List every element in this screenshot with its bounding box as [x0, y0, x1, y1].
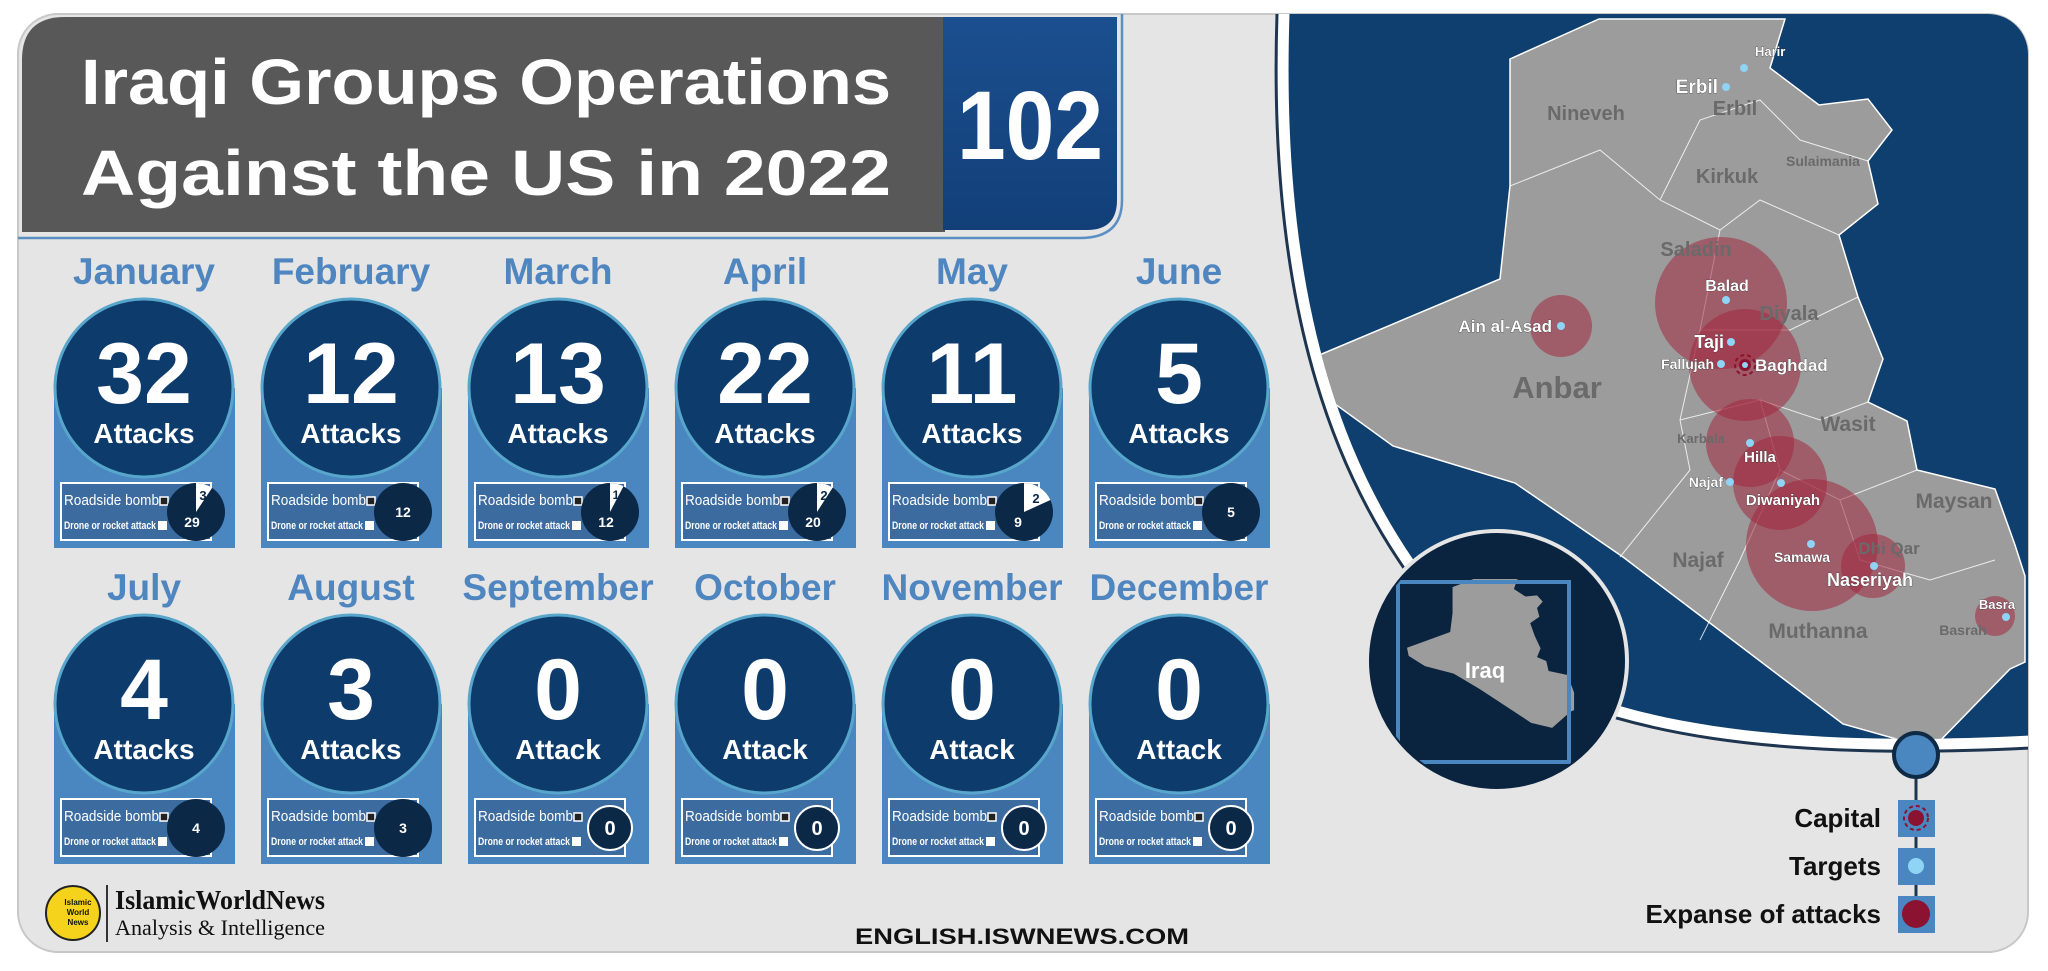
card: April: Roadside bomb	[685, 492, 780, 509]
card: December: Attack	[1136, 734, 1222, 765]
province labels: Anbar	[1512, 370, 1602, 405]
province labels: Diyala	[1760, 303, 1819, 325]
card: October: 0	[811, 818, 823, 840]
card: March: 1	[613, 488, 620, 502]
card: October: Attack	[722, 734, 808, 765]
card: October: Roadside bomb	[685, 808, 780, 825]
card: May	[882, 251, 1063, 548]
card: August: Drone or rocket attack	[271, 836, 364, 848]
card: December	[1089, 567, 1270, 864]
legend: Capital	[1794, 803, 1881, 833]
target labels: Diwaniyah	[1746, 492, 1820, 509]
inset map: Iraq	[1367, 531, 1627, 791]
card: February: 12	[395, 504, 411, 520]
card: January: Attacks	[93, 418, 195, 449]
card: March: Roadside bomb	[478, 492, 573, 509]
province labels: Najaf	[1672, 549, 1725, 572]
province labels: Basrah	[1939, 622, 1987, 638]
title banner	[18, 14, 1122, 238]
card: November	[882, 567, 1063, 864]
card: July: 4	[120, 642, 168, 738]
card: July	[54, 567, 235, 864]
legend: Expanse of attacks	[1645, 899, 1881, 929]
province labels: Karbala	[1677, 431, 1726, 446]
target labels: Najaf	[1689, 474, 1723, 490]
card: August: Attacks	[300, 734, 402, 765]
card: February: Attacks	[300, 418, 402, 449]
card: January: January	[73, 251, 215, 292]
target labels: Fallujah	[1661, 356, 1714, 372]
province labels: Maysan	[1915, 490, 1993, 513]
card: December: Roadside bomb	[1099, 808, 1194, 825]
target labels: Harir	[1755, 44, 1785, 59]
card: January: 32	[96, 326, 192, 422]
target dots	[1557, 64, 2010, 621]
logo: IslamicWorldNews: World	[67, 908, 89, 917]
target labels: Basra	[1979, 597, 2016, 612]
card: April: 2	[820, 488, 828, 503]
target labels: Ain al-Asad	[1458, 317, 1552, 336]
card: June: June	[1136, 251, 1222, 292]
province labels	[1512, 98, 1993, 643]
capital marker: Baghdad	[1735, 355, 1755, 375]
province labels: Kirkuk	[1696, 166, 1759, 188]
website footer: ENGLISH.ISWNEWS.COM	[855, 924, 1189, 949]
card: April: 20	[805, 514, 821, 530]
card: July: Roadside bomb	[64, 808, 159, 825]
card: February: 12	[303, 326, 399, 422]
card: January: 29	[184, 514, 200, 530]
card: May: 11	[927, 326, 1017, 422]
province labels: Sulaimania	[1786, 153, 1860, 169]
card: January: Drone or rocket attack	[64, 520, 157, 532]
card: August: Roadside bomb	[271, 808, 366, 825]
card: January	[54, 251, 235, 548]
card: June	[1089, 251, 1270, 548]
card: October: October	[694, 567, 836, 608]
logo: IslamicWorldNews	[46, 885, 325, 942]
card: November: 0	[948, 642, 996, 738]
province labels: Nineveh	[1547, 103, 1625, 125]
legend	[1645, 733, 1938, 933]
card: March: March	[504, 251, 612, 292]
legend: Targets	[1789, 851, 1881, 881]
card: October: Drone or rocket attack	[685, 836, 778, 848]
logo: IslamicWorldNews: Analysis & Intelligence	[115, 915, 325, 940]
card: April: 22	[717, 326, 813, 422]
card: March: 13	[510, 326, 606, 422]
card: February: February	[272, 251, 431, 292]
card: September: Attack	[515, 734, 601, 765]
card: September: September	[462, 567, 654, 608]
card: June: Attacks	[1128, 418, 1230, 449]
total counter: 102: 102	[957, 71, 1103, 180]
inset map: Iraq: Iraq	[1465, 658, 1505, 683]
card: April	[675, 251, 856, 548]
title banner: Against the US in 2022	[81, 137, 891, 209]
province labels: Dhi Qar	[1858, 539, 1920, 558]
province labels: Muthanna	[1768, 620, 1868, 643]
province labels: Saladin	[1660, 239, 1732, 261]
card: July: Drone or rocket attack	[64, 836, 157, 848]
total counter: 102	[943, 17, 1117, 230]
card: May: Roadside bomb	[892, 492, 987, 509]
target labels: Naseriyah	[1827, 570, 1913, 590]
map: Iraq	[1317, 19, 2025, 749]
card: May: Attacks	[921, 418, 1023, 449]
logo: IslamicWorldNews: Islamic	[64, 898, 92, 907]
card: August: August	[287, 567, 415, 608]
province labels: Wasit	[1820, 413, 1876, 436]
card: December: 0	[1155, 642, 1203, 738]
card: July: 4	[192, 820, 200, 836]
card: January: Roadside bomb	[64, 492, 159, 509]
card: August: 3	[327, 642, 375, 738]
card: February: Roadside bomb	[271, 492, 366, 509]
card: August	[261, 567, 442, 864]
card: April: Drone or rocket attack	[685, 520, 778, 532]
attack expanse circles	[1530, 237, 2015, 636]
province labels: Erbil	[1713, 98, 1757, 120]
target labels: Taji	[1694, 332, 1724, 352]
card: October: 0	[741, 642, 789, 738]
card: August: 3	[399, 820, 407, 836]
card: May: 2	[1032, 491, 1040, 506]
logo: IslamicWorldNews: IslamicWorldNews	[115, 885, 325, 915]
card: January: 3	[199, 488, 207, 503]
card: March: Attacks	[507, 418, 609, 449]
card: March: 12	[598, 514, 614, 530]
card: November: November	[882, 567, 1062, 608]
card: October	[675, 567, 856, 864]
card: May: Drone or rocket attack	[892, 520, 985, 532]
card: September: 0	[534, 642, 582, 738]
logo: IslamicWorldNews: News	[68, 918, 89, 927]
card: February	[261, 251, 442, 548]
card: July: Attacks	[93, 734, 195, 765]
card: June: 5	[1227, 504, 1235, 520]
card: March: Drone or rocket attack	[478, 520, 571, 532]
card: March	[468, 251, 649, 548]
card: June: Roadside bomb	[1099, 492, 1194, 509]
card: May: May	[936, 251, 1008, 292]
target labels: Baghdad	[1755, 356, 1828, 375]
target labels: Samawa	[1774, 549, 1830, 565]
card: September	[462, 567, 654, 864]
card: December: December	[1090, 567, 1268, 608]
card: July: July	[107, 567, 181, 608]
target labels: Erbil	[1676, 77, 1718, 98]
card: April: April	[723, 251, 807, 292]
card: April: Attacks	[714, 418, 816, 449]
card: November: 0	[1018, 818, 1030, 840]
target labels	[1458, 44, 2016, 612]
card: June: 5	[1155, 326, 1203, 422]
card: December: 0	[1225, 818, 1237, 840]
map panel	[1289, 0, 2040, 933]
card: May: 9	[1014, 514, 1022, 530]
card: September: 0	[604, 818, 616, 840]
target labels: Hilla	[1744, 449, 1776, 466]
card: November: Roadside bomb	[892, 808, 987, 825]
title banner: Iraqi Groups Operations	[81, 46, 891, 118]
card: November: Attack	[929, 734, 1015, 765]
card: November: Drone or rocket attack	[892, 836, 985, 848]
target labels: Balad	[1705, 278, 1749, 295]
card: September: Drone or rocket attack	[478, 836, 571, 848]
card: June: Drone or rocket attack	[1099, 520, 1192, 532]
card: February: Drone or rocket attack	[271, 520, 364, 532]
card: September: Roadside bomb	[478, 808, 573, 825]
card: December: Drone or rocket attack	[1099, 836, 1192, 848]
